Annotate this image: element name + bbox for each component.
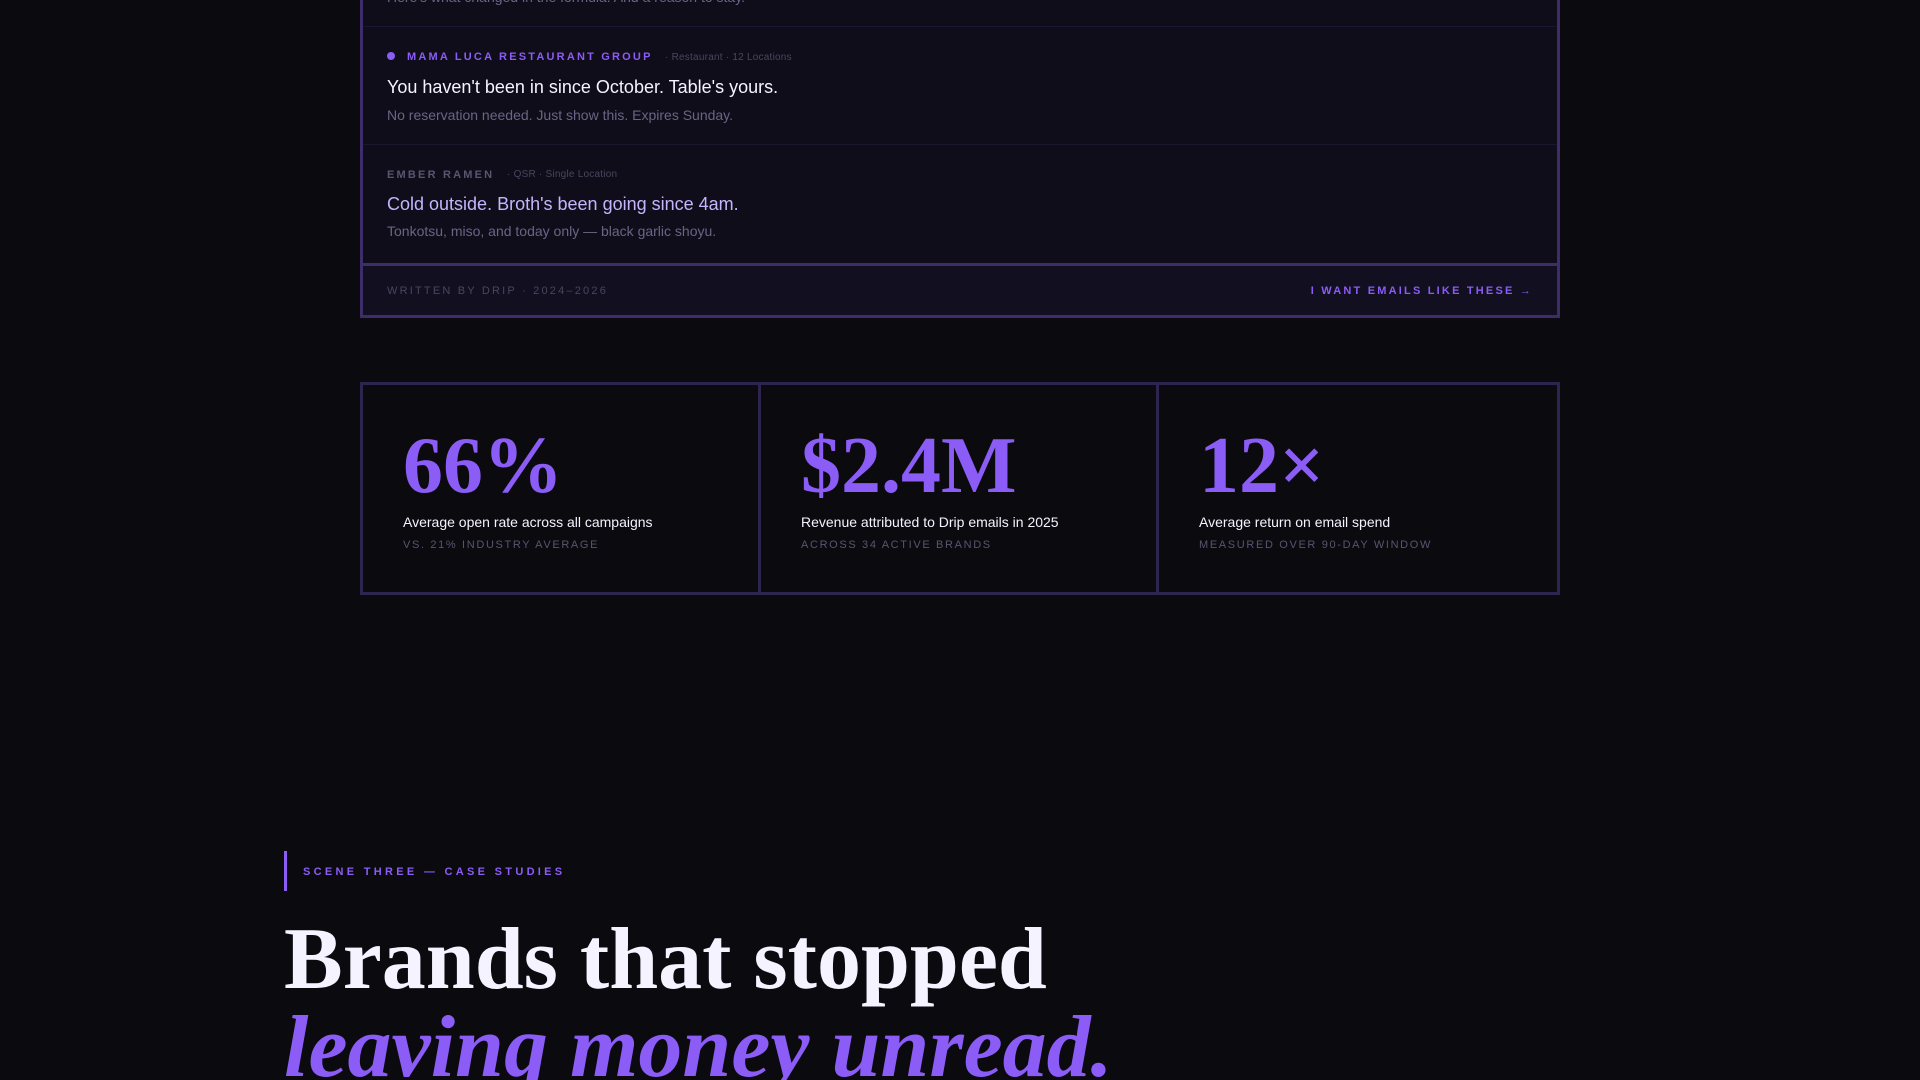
stat: open rate — [403, 422, 653, 551]
panel: email list — [360, 0, 1560, 318]
brand label: MAMA LUCA RESTAURANT GROUP — [407, 51, 653, 63]
description: Average return on email spend — [1199, 514, 1390, 530]
divider: stat one and two — [758, 385, 761, 592]
description: Revenue attributed to Drip emails in 2025 — [801, 514, 1059, 530]
section eyebrow — [284, 851, 584, 891]
icon: active dot — [387, 52, 395, 60]
category label: · Restaurant · 12 Locations — [665, 52, 792, 63]
call to action link: I WANT EMAILS LIKE THESE → — [1311, 285, 1533, 297]
headline: Cold outside. Broth's been going since 4am. — [387, 194, 739, 214]
eyebrow text: SCENE THREE — CASE STUDIES — [303, 866, 565, 878]
note: ACROSS 34 ACTIVE BRANDS — [801, 539, 992, 551]
brand label: EMBER RAMEN — [387, 169, 494, 181]
note: MEASURED OVER 90-DAY WINDOW — [1199, 539, 1432, 551]
title — [284, 916, 1113, 1080]
panel footer — [363, 263, 1557, 315]
number: $2.4M — [801, 422, 1017, 510]
description: Average open rate across all campaigns — [403, 514, 653, 530]
headline: You haven't been in since October. Table's yours. — [387, 77, 778, 97]
preview text: No reservation needed. Just show this. Expires Sunday. — [387, 107, 733, 123]
footer credit: WRITTEN BY DRIP · 2024–2026 — [387, 285, 608, 297]
email row: previous, cropped subject line — [363, 0, 1557, 27]
stat: revenue — [801, 422, 1059, 551]
email row: Ember Ramen — [387, 169, 739, 239]
preview text: Tonkotsu, miso, and today only — black garlic shoyu. — [387, 223, 716, 239]
panel: stats — [360, 382, 1560, 595]
number: 12× — [1199, 422, 1325, 510]
email row: Mama Luca Restaurant Group — [363, 27, 1557, 145]
divider: stat two and three — [1156, 385, 1159, 592]
note: VS. 21% INDUSTRY AVERAGE — [403, 539, 599, 551]
category label: · QSR · Single Location — [507, 169, 617, 180]
number: 66% — [403, 422, 563, 510]
stat: return — [1199, 422, 1432, 551]
